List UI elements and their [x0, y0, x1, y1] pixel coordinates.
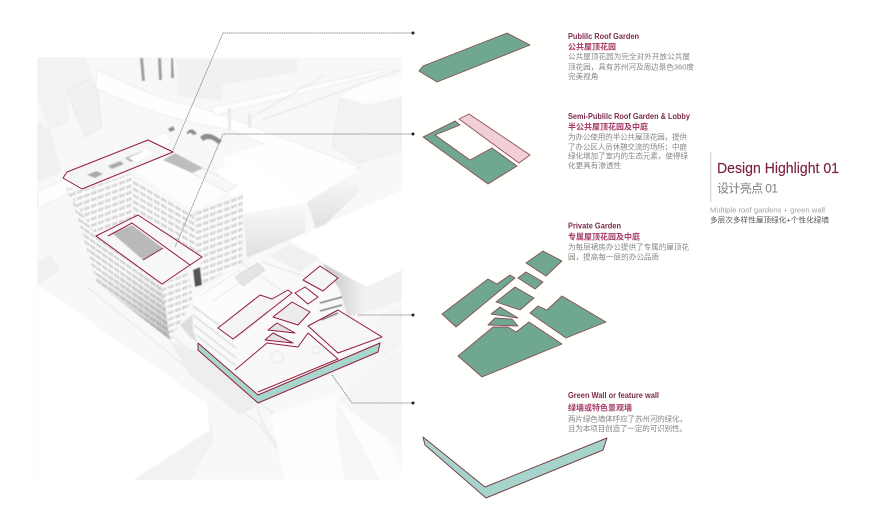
leader line: private garden	[358, 314, 414, 316]
office tower	[63, 140, 243, 340]
diagram: semi-public roof garden and lobby	[423, 114, 530, 184]
red roof garden outlines	[63, 140, 382, 403]
text block: semi-public roof garden: 为办公使用的半公共屋顶花园，提供	[568, 132, 687, 142]
site background	[193, 267, 202, 287]
diagram: public roof garden	[419, 33, 530, 82]
subtitle english: Multiple roof gardens + green wall	[710, 208, 825, 214]
text block: private garden: Private Garden	[568, 222, 621, 230]
text block: green wall	[568, 391, 687, 433]
text block: green wall: 绿墙或特色景观墙	[568, 402, 632, 412]
text block: semi-public roof garden	[568, 112, 690, 170]
chinese heading: 设计亮点 01	[717, 180, 778, 196]
leader line: semi-public roof garden	[175, 132, 414, 247]
podium and terraced lower building	[180, 252, 348, 366]
text block: private garden: 为每层裙房办公提供了专属的屋顶花	[568, 242, 689, 252]
text block: semi-public roof garden: 绿化增加了室内的生态元素，使得绿	[568, 150, 688, 160]
text block: semi-public roof garden: 半公共屋顶花园及中庭	[568, 122, 648, 132]
heading: Design Highlight 01	[717, 160, 839, 177]
title block: design highlight	[710, 152, 839, 224]
diagram: private garden	[442, 251, 606, 377]
text block: green wall: 两片绿色墙体呼应了苏州河的绿化，	[568, 414, 687, 424]
leader line: green wall	[332, 375, 414, 404]
text block: public roof garden: Publilc Roof Garden	[568, 32, 639, 41]
text block: semi-public roof garden: 化更具有渗透性	[568, 160, 622, 170]
text block: public roof garden	[568, 32, 694, 81]
leader line: public roof garden	[173, 32, 414, 150]
text block: semi-public roof garden: 了办公区人员休憩交流的场所；中庭	[568, 142, 687, 152]
text block: green wall: 且为本项目创造了一定的可识别性。	[568, 423, 687, 433]
text block: private garden: 专属屋顶花园及中庭	[568, 232, 640, 242]
diagram: green wall	[423, 437, 607, 498]
panel: axonometric building model	[37, 57, 402, 480]
text block: semi-public roof garden: Semi-Publilc Roof Garden & Lobby	[568, 112, 690, 121]
text block: public roof garden: 顶花园，具有苏州河及周边景色360度	[568, 62, 694, 72]
surrounding context buildings	[66, 58, 402, 450]
text block: green wall: Green Wall or feature wall	[568, 391, 659, 400]
text block: public roof garden: 完美视角	[568, 71, 598, 81]
green wall strip	[198, 343, 380, 403]
text block: private garden: 园，提高每一层的办公品质	[568, 252, 660, 262]
text block: private garden	[568, 222, 689, 262]
text block: public roof garden: 公共屋顶花园为完全对外开放公共屋	[568, 51, 690, 61]
subtitle chinese: 多层次多样性屋顶绿化+个性化绿墙	[710, 214, 829, 224]
text block: public roof garden: 公共屋顶花园	[568, 42, 616, 52]
